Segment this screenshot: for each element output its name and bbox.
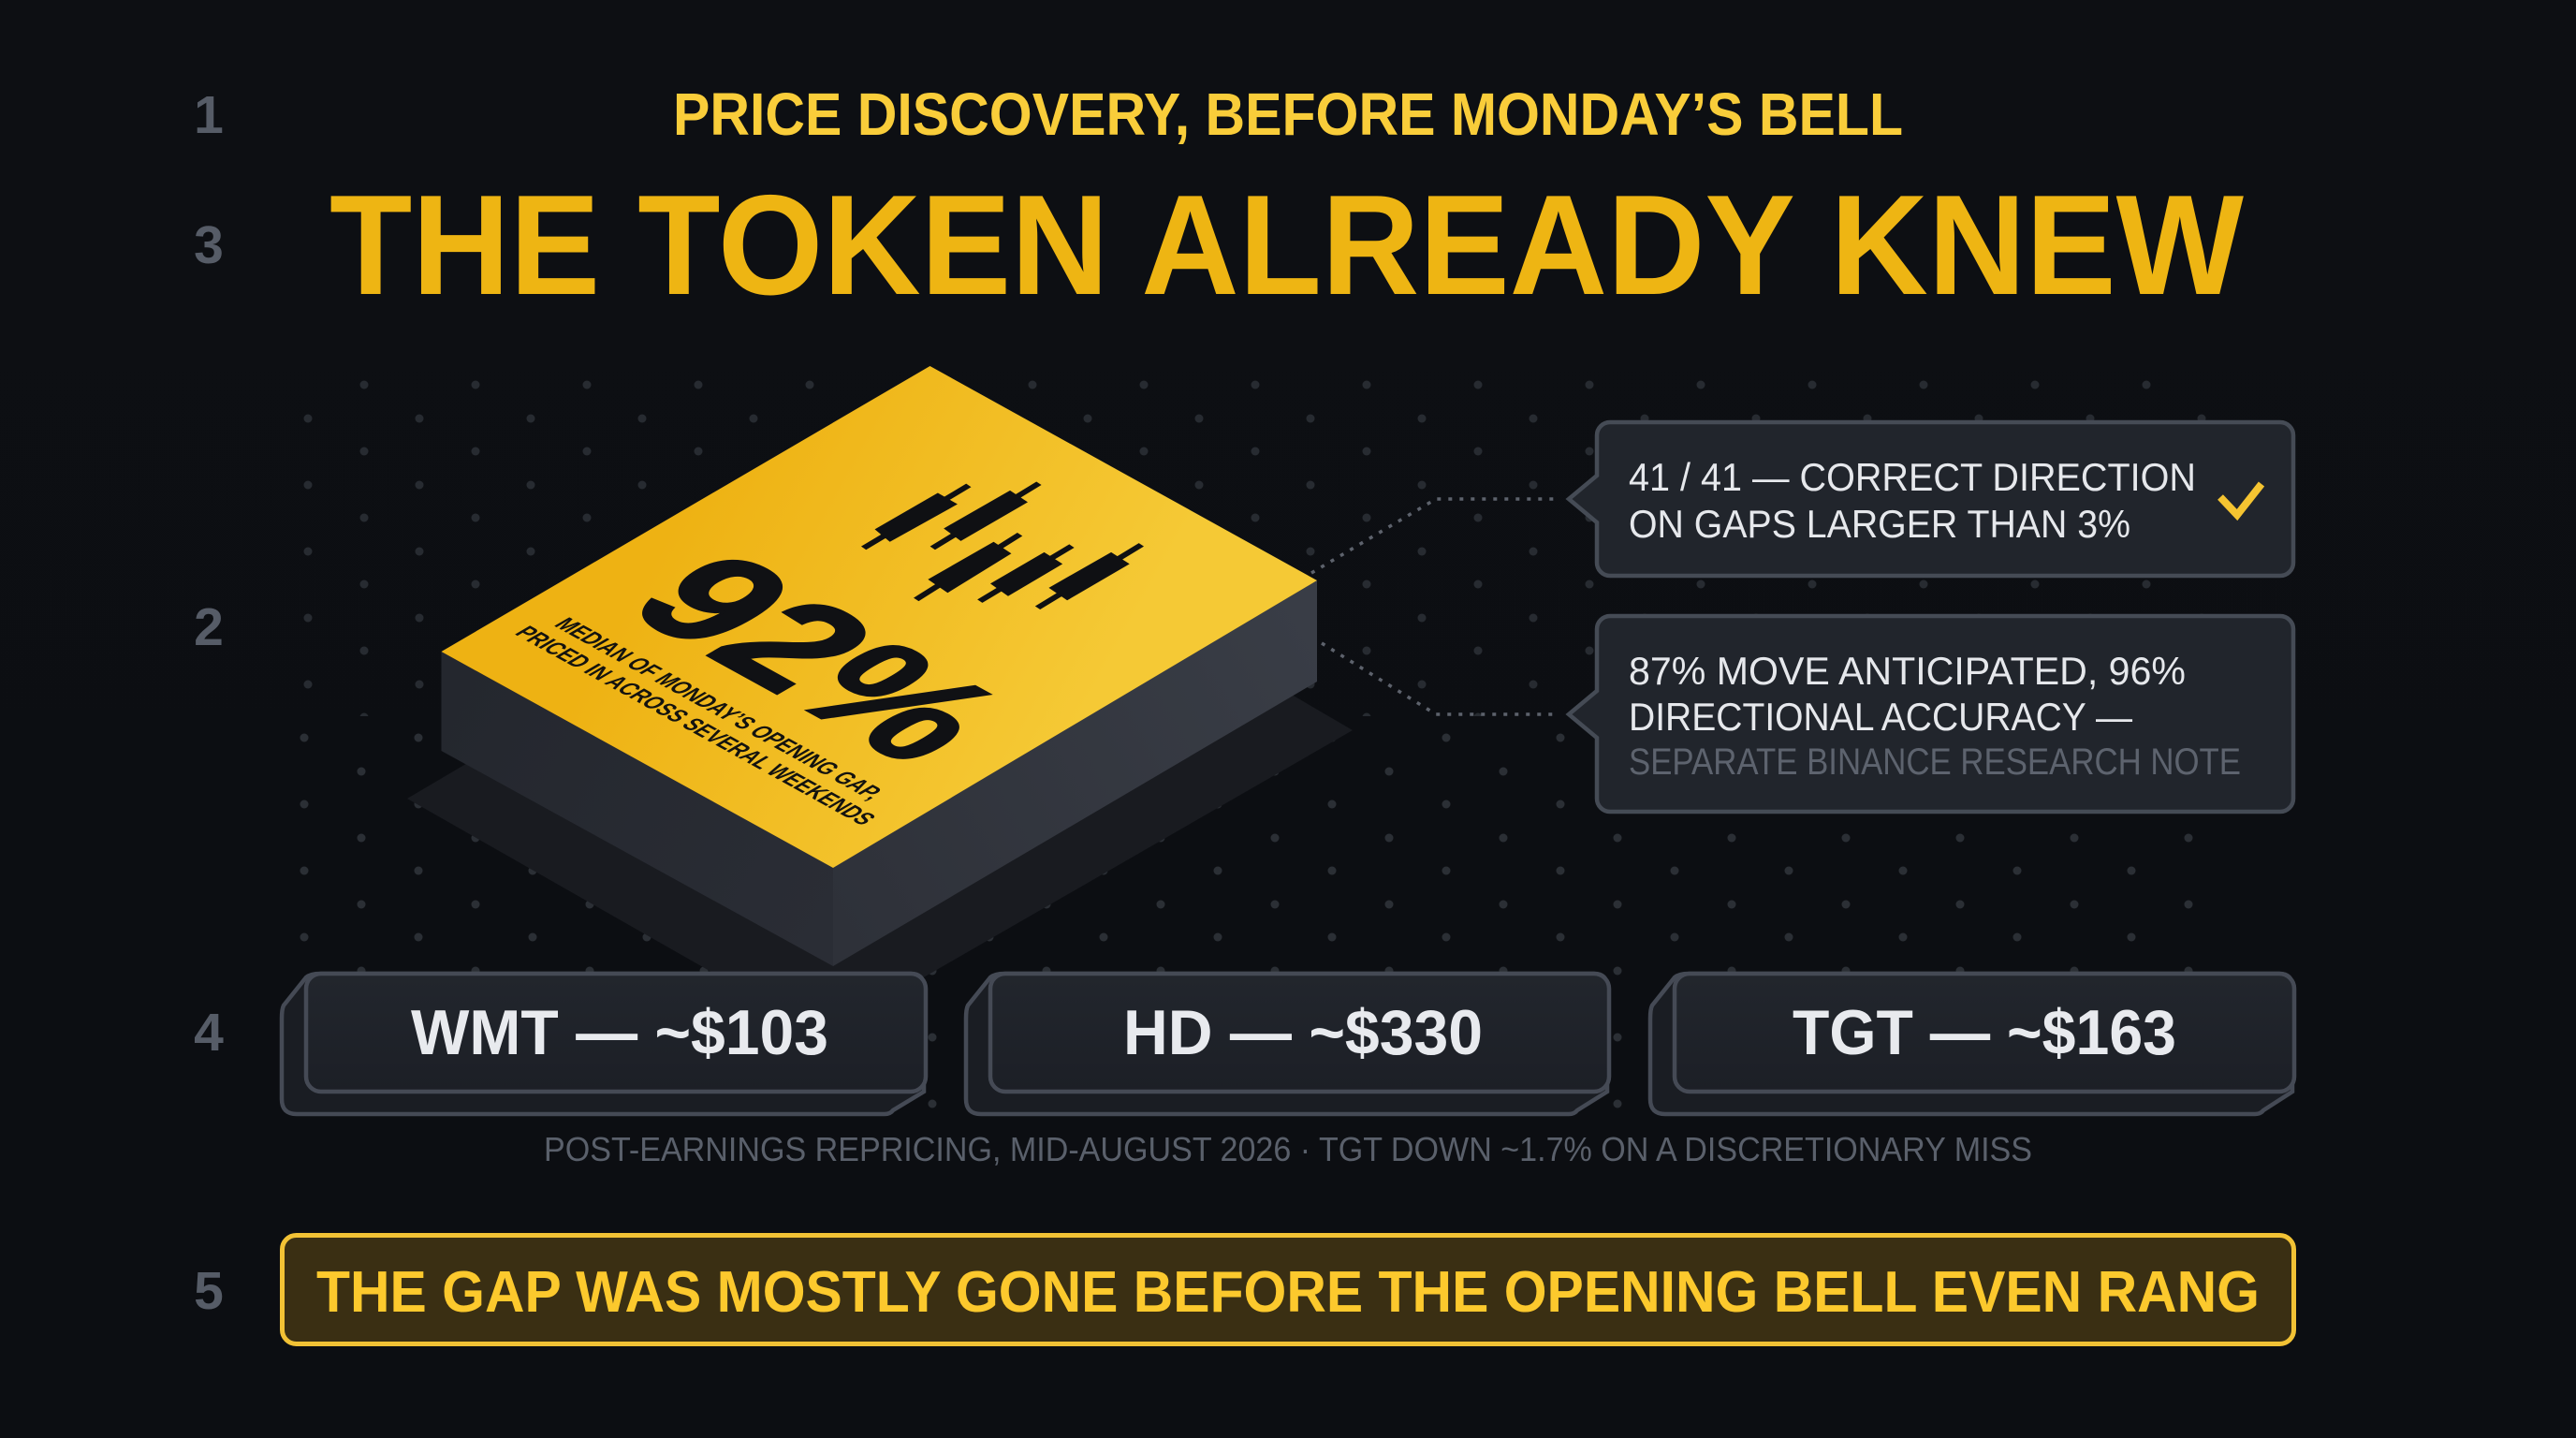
callout 1 line 2: ON GAPS LARGER THAN 3%: [1629, 502, 2130, 546]
eyebrow heading: PRICE DISCOVERY, BEFORE MONDAY’S BELL: [673, 81, 1903, 148]
isometric block: 92% statistic: [407, 366, 1353, 1035]
callout 2 line 1: 87% MOVE ANTICIPATED, 96%: [1629, 649, 2186, 693]
callout 2 source note: SEPARATE BINANCE RESEARCH NOTE: [1629, 741, 2241, 783]
price chip: HD: [966, 974, 1609, 1114]
chip base: [1650, 974, 2292, 1114]
dotted connector to callout 2: [1322, 643, 1558, 714]
chip face: [306, 974, 926, 1092]
title: THE TOKEN ALREADY KNEW: [329, 166, 2245, 325]
chip label: WMT — ~$103: [411, 997, 828, 1068]
row number 3: 3: [194, 215, 224, 275]
block top face: [442, 366, 1317, 868]
callout: 87% and 96%: [1569, 616, 2293, 812]
row number 1: 1: [194, 85, 224, 145]
block left face: [442, 652, 833, 966]
chip face: [990, 974, 1609, 1092]
big statistic 92%: 92%: [590, 530, 1046, 786]
row number 4: 4: [194, 1003, 224, 1063]
callout 2 box: [1569, 616, 2293, 812]
price chip: TGT: [1650, 974, 2294, 1114]
price chip: WMT: [282, 974, 926, 1114]
banner box: [283, 1236, 2293, 1344]
row number 5: 5: [194, 1261, 224, 1321]
banner text: THE GAP WAS MOSTLY GONE BEFORE THE OPENING BELL EVEN RANG: [316, 1259, 2260, 1325]
icon: check mark: [2220, 484, 2261, 515]
statistic caption line 2: PRICED IN ACROSS SEVERAL WEEKENDS: [509, 623, 882, 829]
chip label: HD — ~$330: [1123, 997, 1483, 1068]
dotted connector to callout 1: [1311, 499, 1558, 573]
callout: 41 of 41: [1569, 422, 2293, 576]
chip base: [966, 974, 1607, 1114]
statistic caption line 1: MEDIAN OF MONDAY’S OPENING GAP,: [549, 614, 890, 803]
icon: candlesticks: [864, 483, 1141, 608]
callout 2 line 2: DIRECTIONAL ACCURACY —: [1629, 695, 2132, 739]
block ground shadow: [407, 487, 1353, 1035]
chips footnote: POST-EARNINGS REPRICING, MID-AUGUST 2026 · TGT DOWN ~1.7% ON A DISCRETIONARY MISS: [544, 1130, 2032, 1168]
chip face: [1675, 974, 2294, 1092]
block right face: [833, 580, 1317, 966]
callout 1 box: [1569, 422, 2293, 576]
callout 1 line 1: 41 / 41 — CORRECT DIRECTION: [1629, 455, 2196, 499]
row number 2: 2: [194, 597, 224, 657]
chip base: [282, 974, 924, 1114]
chip label: TGT — ~$163: [1793, 997, 2176, 1068]
takeaway banner: [283, 1236, 2293, 1344]
